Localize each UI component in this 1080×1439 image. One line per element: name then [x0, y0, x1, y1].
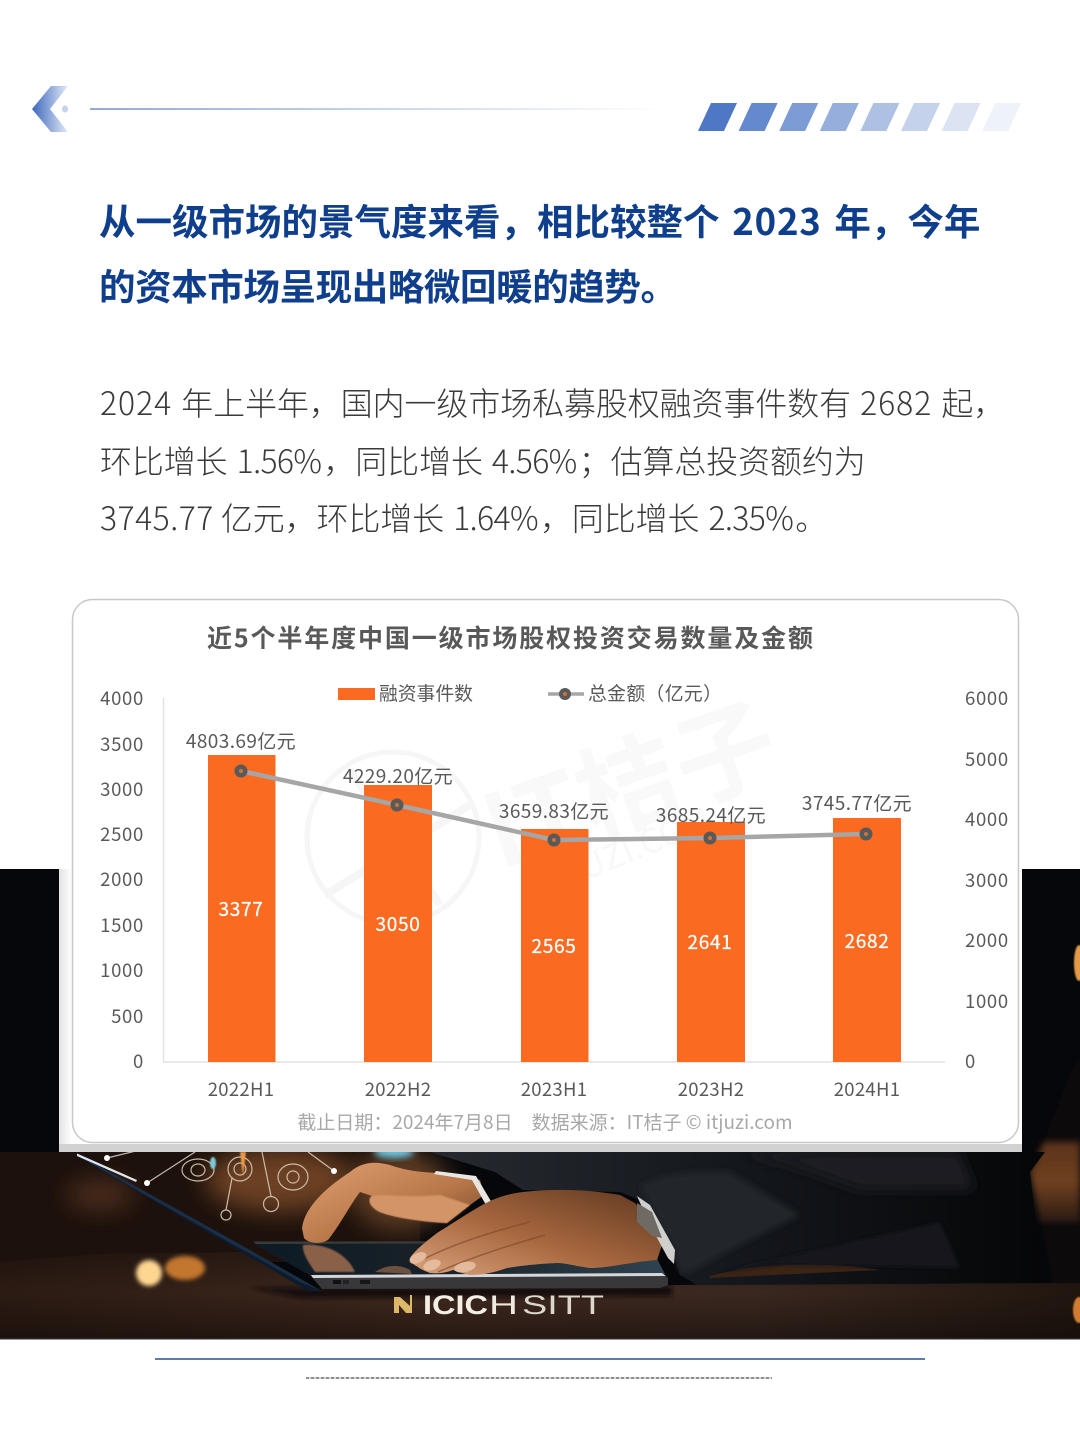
chart axes	[164, 698, 945, 1062]
chart legend: 融资事件数	[379, 679, 473, 706]
right axis labels: 5000	[965, 746, 1009, 772]
header rule	[90, 108, 665, 110]
body paragraph: 环比增长 1.56%，同比增长 4.56%；估算总投资额约为	[100, 437, 866, 483]
bar value labels	[219, 895, 889, 959]
footer rule	[155, 1358, 925, 1360]
source note: 截止日期：2024年7月8日 数据来源：IT桔子 © itjuzi.com	[297, 1108, 793, 1135]
left axis labels: 2000	[100, 866, 144, 892]
chart legend: 总金额（亿元）	[588, 679, 722, 706]
category labels: 2024H1	[834, 1076, 900, 1102]
left axis labels: 3000	[100, 776, 144, 802]
line series	[234, 764, 872, 846]
line value labels: 4229.20亿元	[343, 762, 453, 789]
heading: 的资本市场呈现出略微回暖的趋势。	[99, 258, 677, 311]
chart title: 近5个半年度中国一级市场股权投资交易数量及金额	[207, 619, 813, 655]
category labels	[208, 1076, 900, 1102]
wristwatch and shirt cuff	[637, 1196, 675, 1264]
logo text in photo: ICIC	[423, 1290, 488, 1320]
tablet reflection	[303, 1245, 355, 1272]
laptop	[250, 1286, 672, 1298]
category labels: 2023H1	[521, 1076, 587, 1102]
logo text in photo	[394, 1290, 604, 1320]
header chevron icon	[32, 86, 68, 132]
category labels: 2023H2	[678, 1076, 744, 1102]
line value labels: 3745.77亿元	[802, 789, 912, 816]
line value labels: 3685.24亿元	[656, 801, 766, 828]
chart watermark	[307, 661, 795, 924]
chart legend	[338, 679, 722, 706]
right axis labels: 2000	[965, 927, 1009, 953]
body paragraph: 2024 年上半年，国内一级市场私募股权融资事件数有 2682 起，	[100, 379, 1005, 425]
left axis labels: 3500	[100, 731, 144, 757]
right axis labels: 3000	[965, 867, 1009, 893]
bar value labels: 3050	[376, 910, 420, 937]
left axis labels: 0	[133, 1048, 144, 1074]
right axis labels: 6000	[965, 685, 1009, 711]
left axis labels: 500	[111, 1003, 144, 1029]
body paragraph	[100, 379, 1005, 540]
left axis labels: 4000	[100, 685, 144, 711]
suit	[430, 1152, 1045, 1285]
left axis labels: 2500	[100, 821, 144, 847]
line value labels: 4803.69亿元	[186, 727, 296, 754]
white backing panel with shadow	[59, 869, 1022, 1152]
heading	[99, 193, 980, 311]
bar value labels: 2565	[532, 932, 576, 959]
logo text in photo: SITT	[522, 1290, 604, 1320]
header parallelograms	[698, 103, 1021, 131]
right axis labels: 1000	[965, 988, 1009, 1014]
bars	[208, 755, 901, 1062]
left axis labels	[100, 685, 144, 1074]
line value labels: 3659.83亿元	[499, 797, 609, 824]
right axis labels	[965, 685, 1009, 1074]
left axis labels: 1500	[100, 912, 144, 938]
line value labels	[186, 727, 912, 828]
footer dotted rule	[306, 1377, 772, 1379]
bar value labels: 2682	[845, 927, 889, 954]
right axis labels: 0	[965, 1048, 976, 1074]
right background glow	[1032, 1060, 1080, 1283]
hologram icons	[107, 1150, 334, 1220]
category labels: 2022H2	[365, 1076, 431, 1102]
logo text in photo: H	[489, 1290, 518, 1320]
body paragraph: 3745.77 亿元，环比增长 1.64%，同比增长 2.35%。	[100, 494, 827, 540]
desk	[0, 1252, 1080, 1339]
right axis labels: 4000	[965, 806, 1009, 832]
left axis labels: 1000	[100, 957, 144, 983]
bar value labels: 3377	[219, 895, 263, 922]
heading: 从一级市场的景气度来看，相比较整个 2023 年，今年	[99, 193, 980, 246]
category labels: 2022H1	[208, 1076, 274, 1102]
hands	[302, 1163, 484, 1243]
chart watermark: IT桔子	[462, 661, 795, 898]
bokeh	[165, 1256, 205, 1280]
chart watermark: ITJUZI.COM	[530, 793, 717, 906]
bar value labels: 2641	[688, 928, 732, 955]
